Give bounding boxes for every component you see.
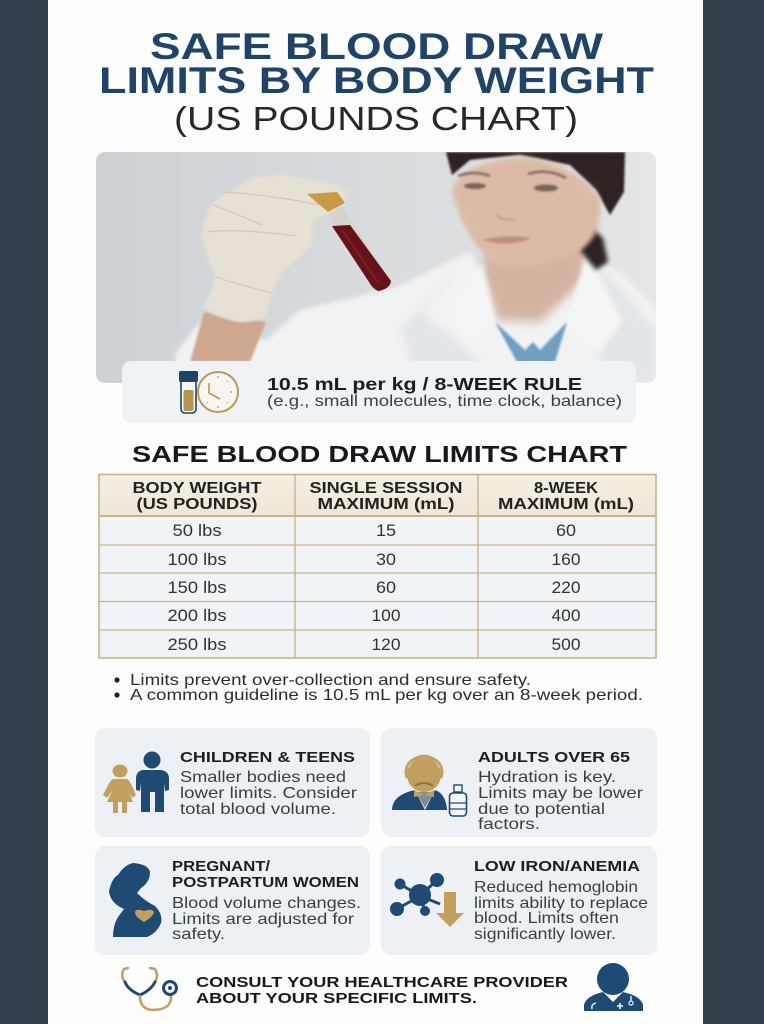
card: pregnant and postpartum women: Blood volume changes. — [172, 895, 361, 912]
title — [99, 26, 654, 137]
chart heading: SAFE BLOOD DRAW LIMITS CHART — [132, 441, 627, 467]
icon: stethoscope — [122, 968, 176, 1010]
rule banner: (e.g., small molecules, time clock, balance) — [267, 393, 622, 410]
table header: (US POUNDS) — [136, 496, 258, 513]
ponytail — [580, 226, 608, 270]
table rows: 100 — [372, 607, 400, 625]
title: SAFE BLOOD DRAW — [150, 26, 603, 67]
table rows: 60 — [556, 522, 576, 540]
table rows: 100 lbs — [168, 551, 226, 569]
card: low iron and anemia: limits ability to replace — [474, 895, 648, 912]
table rows: 150 lbs — [168, 579, 226, 597]
hair — [446, 152, 625, 215]
table rows: 120 — [372, 636, 400, 654]
scrub top — [495, 322, 567, 362]
table rows: 400 — [552, 607, 580, 625]
text: ADULTS OVER 65 — [478, 749, 630, 766]
rule text: 10.5 mL per kg / 8-WEEK RULE — [267, 374, 582, 394]
title: (US POUNDS CHART) — [174, 100, 578, 137]
icon: child and teen — [103, 752, 169, 813]
card: pregnant and postpartum women: POSTPARTUM WOMEN — [172, 874, 359, 891]
card: adults over 65 — [381, 728, 657, 837]
icon: older adult with water bottle — [392, 756, 466, 816]
card: low iron and anemia: blood. Limits often — [474, 910, 619, 927]
table header: BODY WEIGHT — [132, 480, 262, 497]
card: low iron and anemia — [381, 846, 657, 955]
card: low iron and anemia: Reduced hemoglobin — [474, 879, 638, 896]
text: LOW IRON/ANEMIA — [474, 858, 640, 875]
limits table — [99, 474, 656, 658]
eyes and mouth — [458, 172, 566, 244]
table header: MAXIMUM (mL) — [318, 496, 454, 513]
consult message: ABOUT YOUR SPECIFIC LIMITS. — [196, 990, 477, 1007]
table rows — [168, 522, 580, 654]
table header: SINGLE SESSION — [310, 480, 462, 497]
notes: Limits prevent over-collection and ensure safety. — [130, 672, 531, 689]
table header — [132, 480, 634, 513]
table rows: 160 — [552, 551, 580, 569]
card: children and teens — [95, 728, 370, 837]
blood tube — [307, 192, 391, 291]
table rows: 250 lbs — [168, 636, 226, 654]
coat shading — [403, 272, 656, 382]
table rows: 220 — [552, 579, 580, 597]
card: pregnant and postpartum women — [95, 846, 370, 955]
card: pregnant and postpartum women: Limits are adjusted for — [172, 911, 355, 928]
table rows: 500 — [552, 636, 580, 654]
face — [452, 157, 601, 267]
card: adults over 65: due to potential — [478, 801, 605, 818]
table rows: 15 — [376, 522, 396, 540]
card: children and teens: Smaller bodies need — [180, 769, 346, 786]
card: adults over 65: factors. — [478, 816, 540, 833]
consult message — [196, 974, 568, 1007]
notes — [114, 672, 643, 704]
text: CHILDREN & TEENS — [180, 749, 355, 766]
title: LIMITS BY BODY WEIGHT — [99, 60, 654, 101]
neck — [478, 248, 588, 328]
table rows: 30 — [376, 551, 396, 569]
glove — [202, 175, 346, 322]
text: PREGNANT/ — [172, 858, 271, 875]
table rows: 50 lbs — [172, 522, 222, 540]
card: children and teens: lower limits. Consider — [180, 785, 358, 802]
table rows: 200 lbs — [168, 607, 226, 625]
icon: molecule and down arrow — [390, 873, 464, 927]
card: adults over 65: Hydration is key. — [478, 769, 616, 786]
photo: clinician holding a blood tube — [96, 152, 660, 390]
rule banner — [122, 361, 636, 423]
card: children and teens: total blood volume. — [180, 801, 336, 818]
card: pregnant and postpartum women: safety. — [172, 926, 225, 943]
icon: pregnant silhouette — [109, 863, 161, 937]
lab coat — [174, 252, 656, 361]
glove creases — [207, 192, 320, 293]
collar opening — [477, 258, 621, 349]
notes: A common guideline is 10.5 mL per kg over an 8-week period. — [130, 687, 643, 704]
table header: 8-WEEK — [534, 480, 599, 497]
icon: tube and clock — [179, 371, 238, 413]
table header: MAXIMUM (mL) — [498, 496, 634, 513]
wrist — [190, 312, 266, 362]
card: low iron and anemia: significantly lower. — [474, 926, 616, 943]
icon: doctor — [584, 963, 643, 1011]
consult message: CONSULT YOUR HEALTHCARE PROVIDER — [196, 974, 568, 991]
card: adults over 65: Limits may be lower — [478, 785, 644, 802]
table rows: 60 — [376, 579, 396, 597]
